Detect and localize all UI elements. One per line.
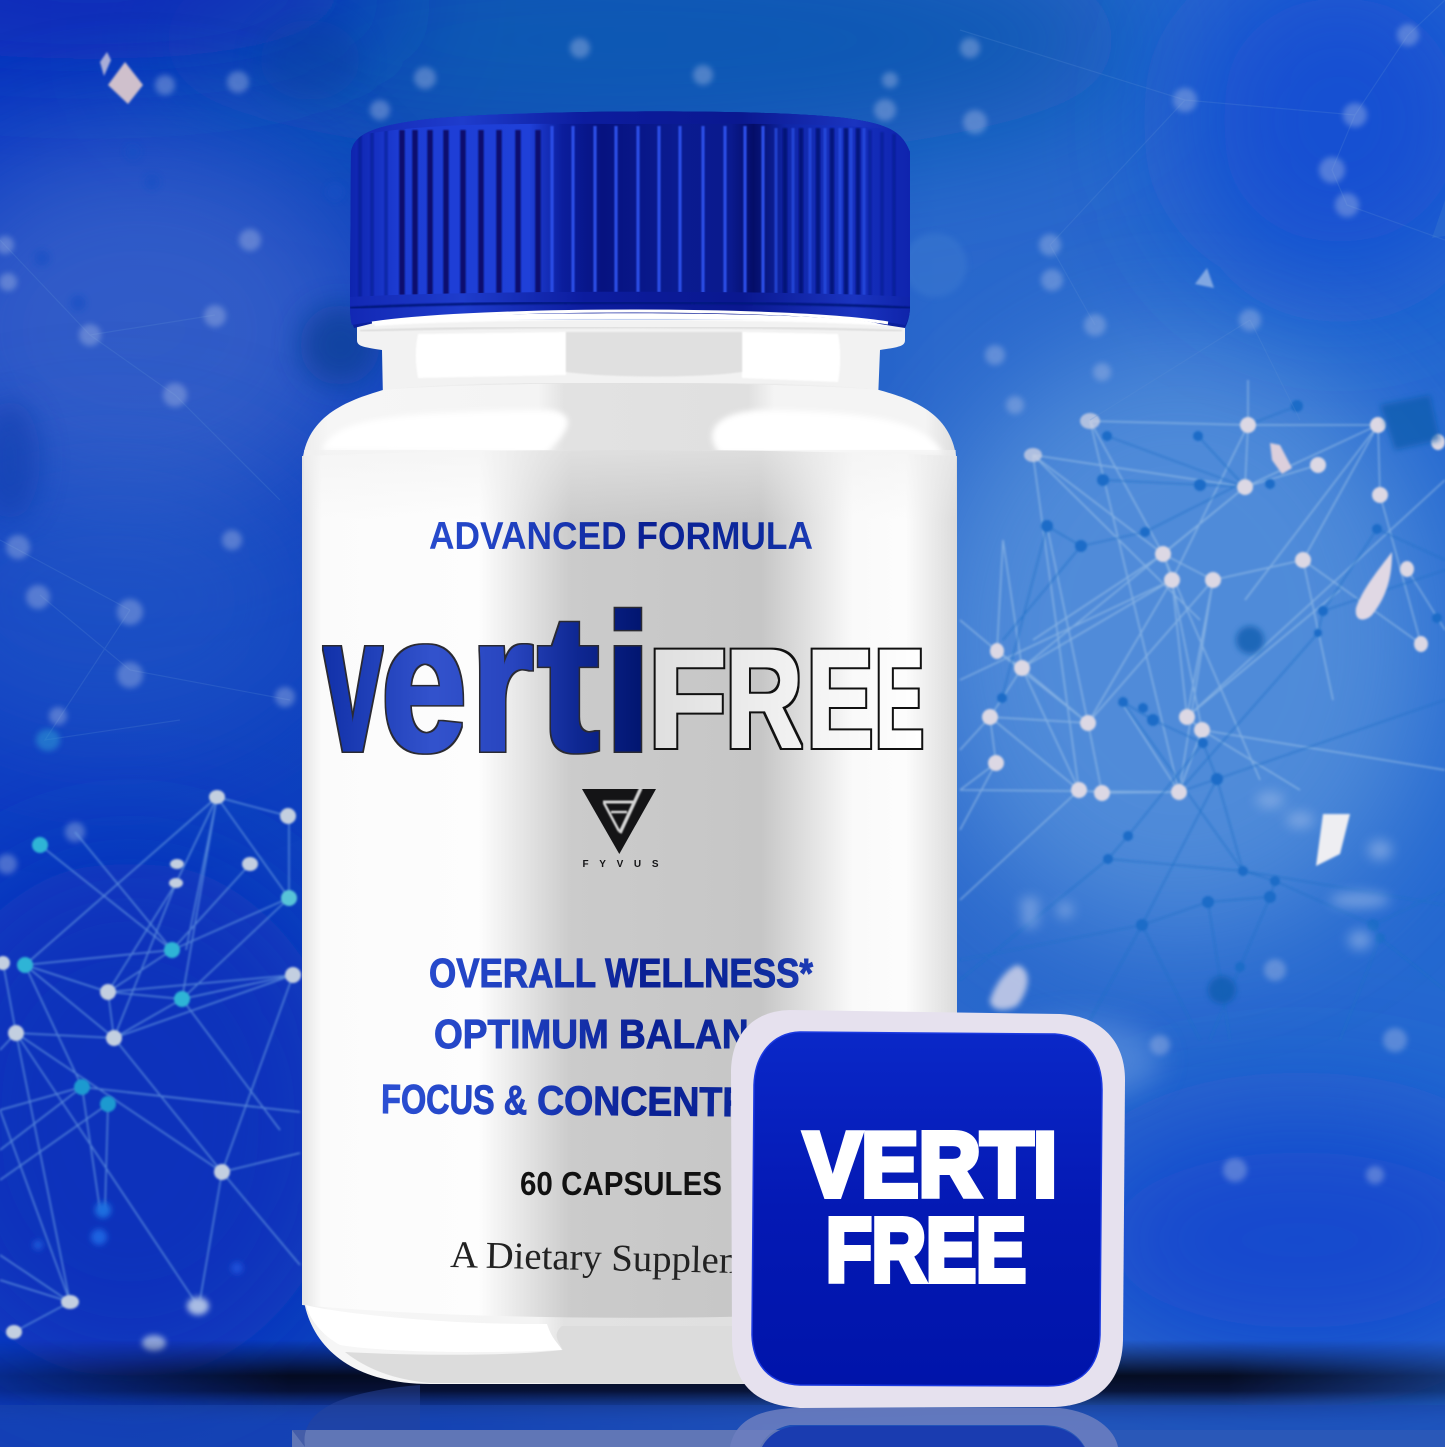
logo wordmark: verti: v	[324, 574, 382, 792]
bottle body	[302, 383, 957, 1384]
logo wordmark: FREE: E	[876, 620, 923, 777]
bottle base highlight	[306, 1305, 780, 1383]
logo wordmark: verti: r	[470, 574, 534, 792]
flakes	[100, 52, 1445, 1010]
logo wordmark: FREE: R	[726, 620, 802, 777]
badge text: verti: VERTI	[804, 1115, 1057, 1216]
bottle	[302, 310, 957, 1384]
label top fade	[304, 450, 956, 520]
badge text: free: FREE	[826, 1201, 1026, 1301]
logo wordmark: FREE: E	[807, 620, 873, 777]
network: lower left	[0, 790, 301, 1351]
badge panel	[752, 1032, 1102, 1386]
benefit: optimum balance: OPTIMUM BALANCE	[434, 1011, 800, 1057]
badge	[731, 1010, 1125, 1408]
benefit: focus and concentration: CONCENTRATION	[537, 1077, 863, 1126]
capsule count: 60 CAPSULES	[520, 1165, 722, 1202]
shoulder highlights	[322, 410, 943, 454]
logo wordmark: FREE: F	[648, 620, 727, 777]
benefit: overall wellness: OVERALL WELLNESS*	[429, 950, 813, 996]
logo wordmark: verti: i	[604, 574, 652, 792]
icon: fyvus logo	[582, 788, 659, 870]
floor shadow and reflection band	[0, 1340, 1445, 1447]
logo wordmark: verti: t	[537, 574, 600, 792]
badge reflection	[730, 1408, 1118, 1447]
cap ribs	[360, 126, 894, 298]
fyvus text: FYVUS	[582, 859, 659, 870]
badge frame	[731, 1010, 1125, 1408]
benefit: focus and concentration: FOCUS &	[381, 1076, 527, 1123]
bottle neck	[357, 310, 905, 400]
network nodes: right side	[982, 395, 1445, 1004]
label text: advanced formula: ADVANCED FORMULA	[429, 515, 813, 558]
logo wordmark: verti: e	[381, 574, 467, 792]
network: right side	[960, 380, 1445, 1040]
label	[302, 450, 957, 1318]
dietary supplement: A Dietary Supplement	[450, 1234, 797, 1283]
bottle cap	[345, 105, 915, 330]
